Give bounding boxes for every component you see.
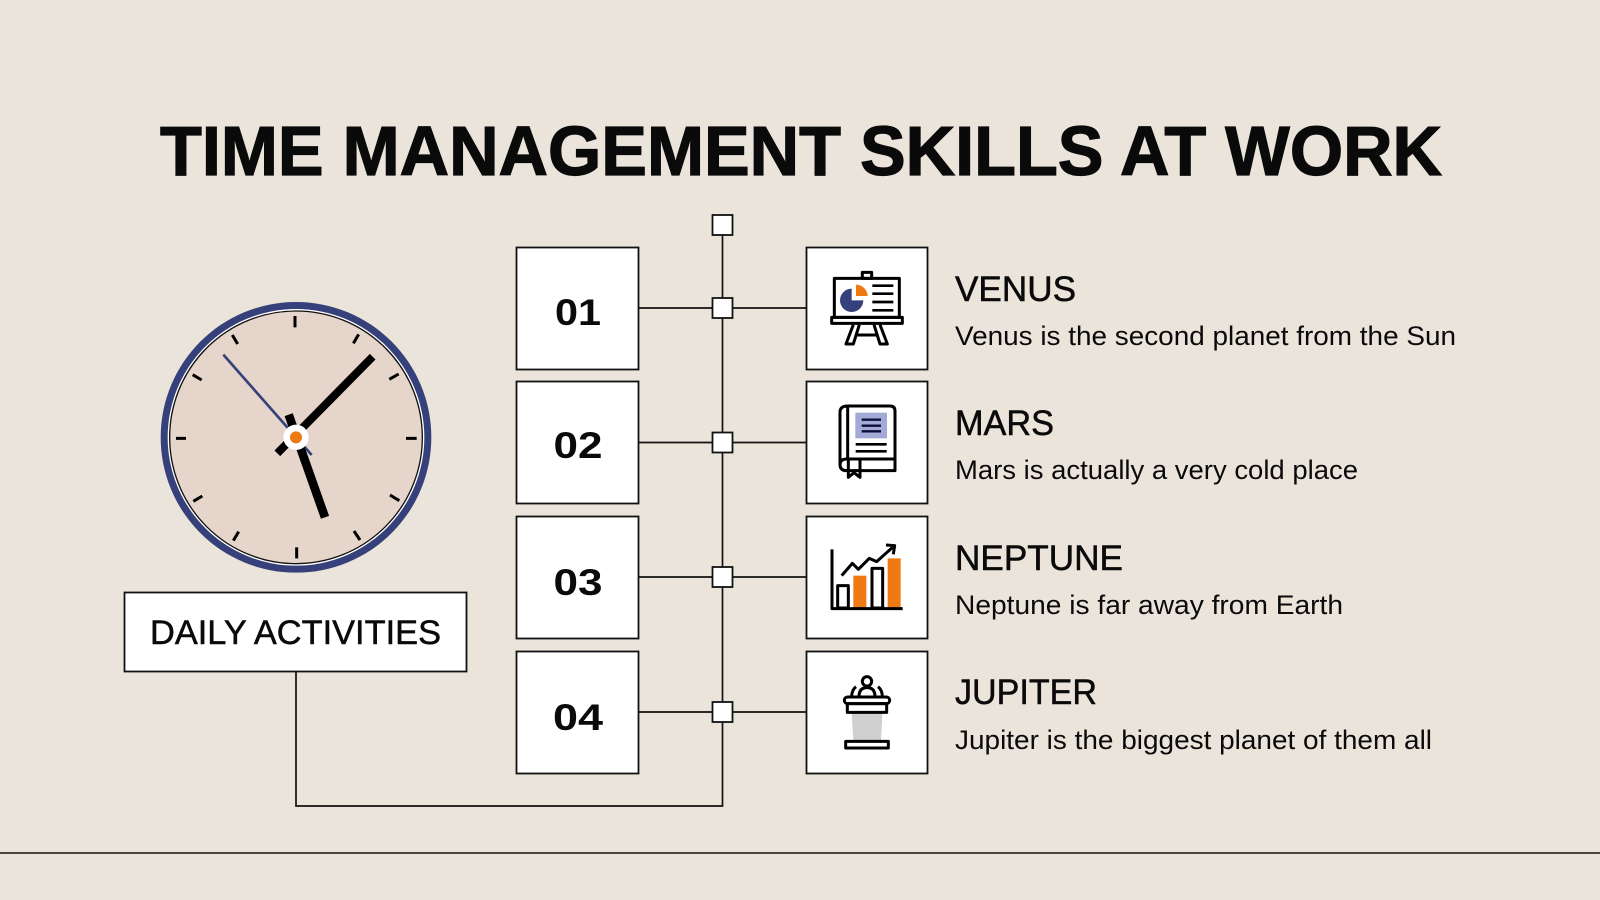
clock hour ticks [176,316,417,558]
number box 02: 02 [554,425,602,466]
clock hub [283,425,309,450]
item: Jupiter [955,673,1432,755]
connector lines [296,235,806,806]
item: Mars: Mars is actually a very cold place [955,455,1358,485]
item: Venus [955,270,1456,351]
number box 03 [516,516,638,638]
item: Neptune: Neptune is far away from Earth [955,590,1343,620]
clock [161,302,431,573]
icon box: presentation board [806,248,928,370]
clock hour hand [289,415,325,517]
footer rule [0,852,1600,854]
icon box: book [806,382,928,504]
daily activities label [124,592,466,672]
icon box: growth chart [806,516,928,638]
number box 01: 01 [555,292,601,333]
icon box: lectern [806,652,928,774]
item: Jupiter: Jupiter is the biggest planet of them all [955,725,1432,755]
item: Neptune [955,539,1343,620]
item: Venus: Venus is the second planet from the Sun [955,321,1456,351]
item: Mars: MARS [955,404,1054,443]
timeline nodes [712,215,732,722]
number box 01 [516,248,638,370]
title: TIME MANAGEMENT SKILLS AT WORK [160,112,1442,190]
item: Jupiter: JUPITER [955,673,1097,712]
item: Venus: VENUS [955,270,1076,309]
clock minute hand [277,357,373,453]
number box 02 [516,382,638,504]
number box 04 [516,652,638,774]
item: Mars [955,404,1358,485]
number box 04: 04 [553,697,604,738]
clock second hand [223,355,312,455]
daily activities label: DAILY ACTIVITIES [150,614,441,652]
item: Neptune: NEPTUNE [955,539,1123,578]
number box 03: 03 [554,562,602,603]
